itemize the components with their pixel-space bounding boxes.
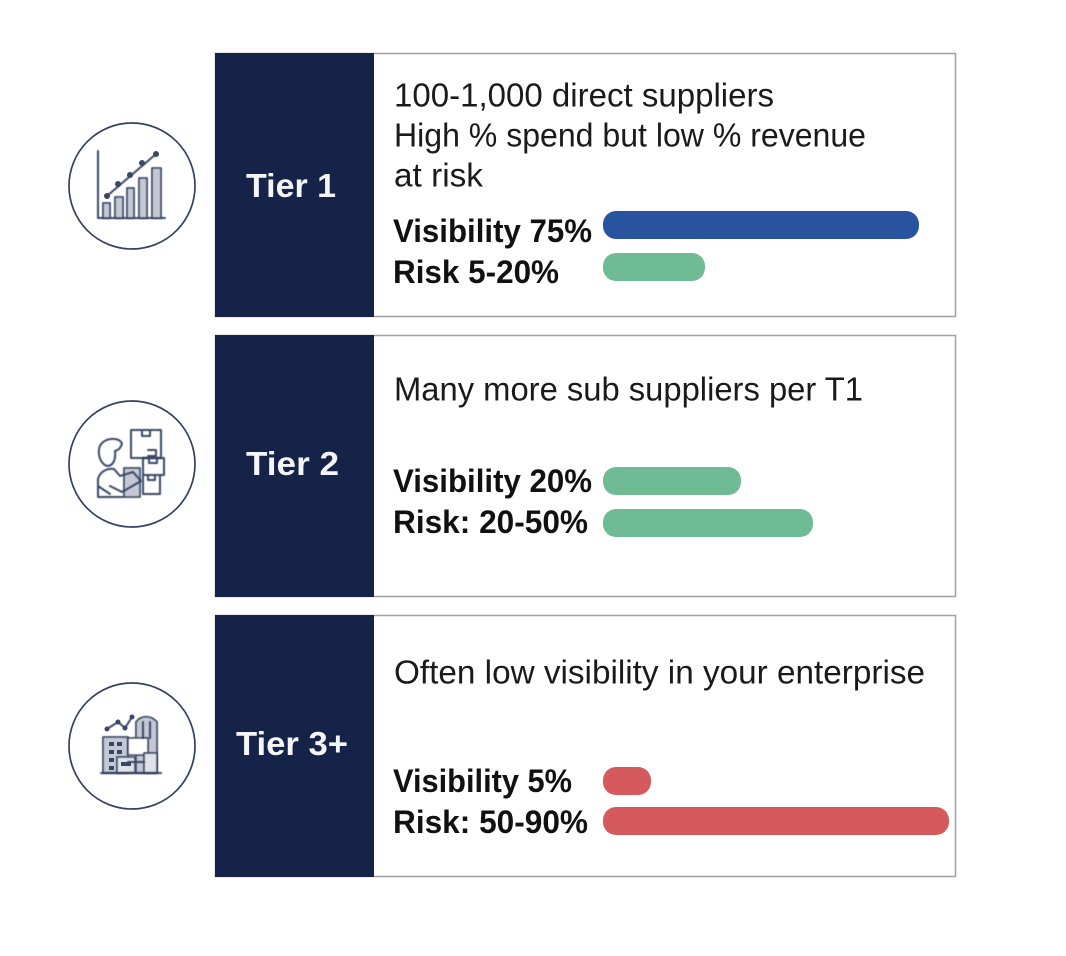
tier 1 description: High % spend but low % revenue [394,116,866,154]
tier 3+ risk bar [603,807,949,835]
panel: tier 1 [215,53,956,317]
icon: industrial buildings in circle [69,683,195,809]
icon: growth chart in circle [69,123,195,249]
tier 1 header block [215,53,374,317]
tier 1 visibility label: Visibility 75% [393,213,592,249]
tier 2 header block [215,335,374,597]
tier 1 description [394,76,866,194]
icon: worker with boxes in circle [69,401,195,527]
tier 1 description: at risk [394,156,484,194]
panel: tier 2 [215,335,956,597]
tier 3+ visibility bar [603,767,651,795]
tier 1 risk label: Risk 5-20% [393,254,559,290]
tier 1 risk bar [603,253,705,281]
tier 3+ risk label: Risk: 50-90% [393,804,588,840]
tier 2 heading: Tier 2 [246,445,339,482]
tier 2 risk label: Risk: 20-50% [393,504,588,540]
tier 2 description: Many more sub suppliers per T1 [394,370,863,408]
tier 3+ description: Often low visibility in your enterprise [394,654,925,690]
tier 3+ header block [215,615,374,877]
tier 2 risk bar [603,509,813,537]
tier 1 description: 100-1,000 direct suppliers [394,76,774,114]
tier 1 heading: Tier 1 [246,167,336,204]
panel: tier 3+ [215,615,956,877]
tier 3+ visibility label: Visibility 5% [393,763,572,799]
tier 2 visibility bar [603,467,741,495]
tier 1 visibility bar [603,211,919,239]
tier 2 visibility label: Visibility 20% [393,463,592,499]
tier 3+ heading: Tier 3+ [236,725,348,762]
